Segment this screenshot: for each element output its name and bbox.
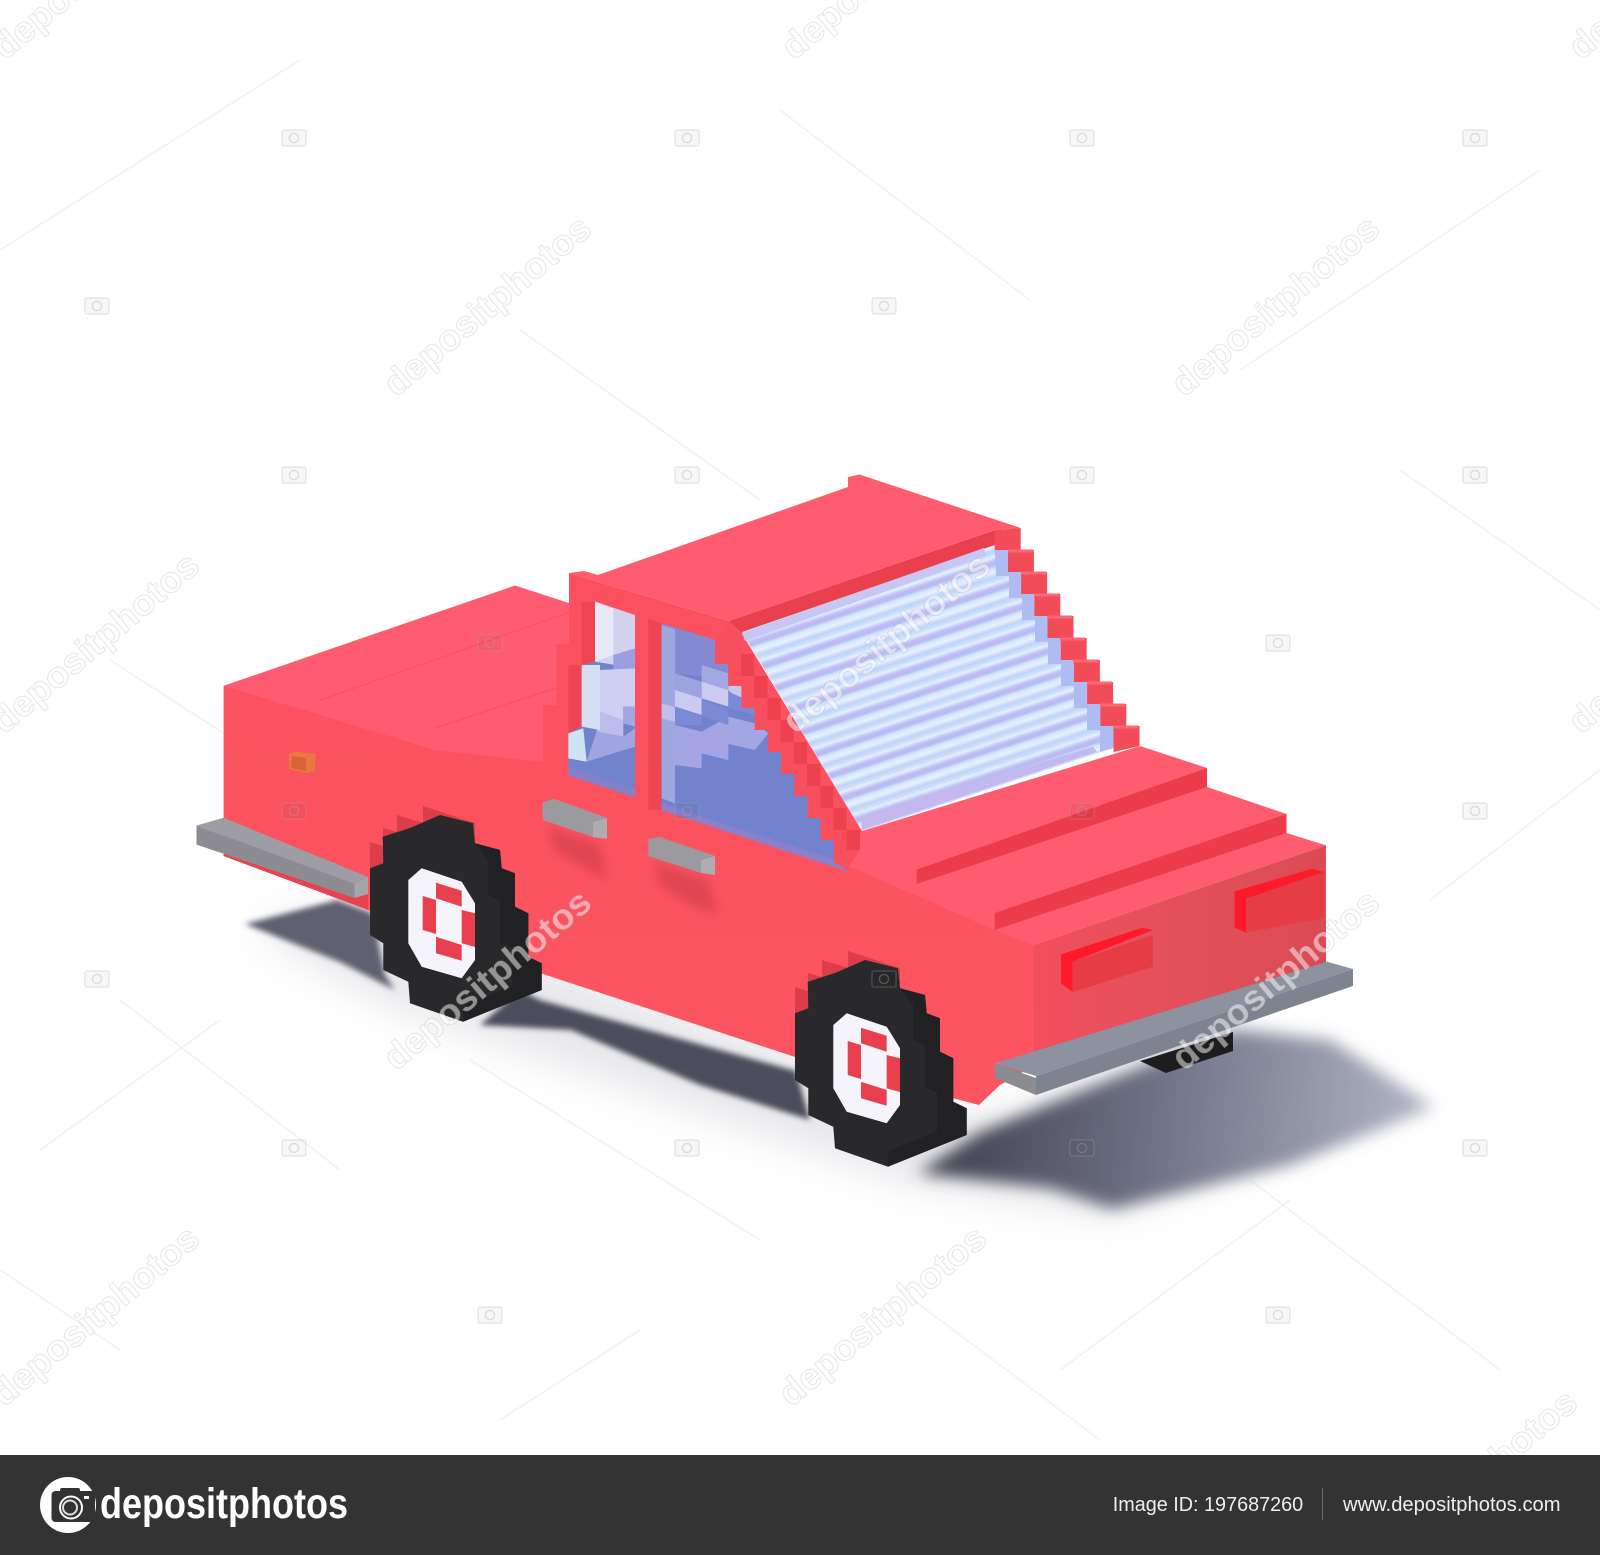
shadow: behind the rear of the car [918, 1030, 1434, 1209]
small camera watermark icons [85, 130, 1487, 1323]
depositphotos diagonal watermarks: depositphotos [375, 881, 599, 1078]
footer website url: www.depositphotos.com [1342, 1493, 1561, 1516]
side marker light [289, 752, 315, 773]
windshield glass [742, 545, 1113, 831]
windshield lower lavender edge [862, 747, 1097, 830]
door handle shadow: front [548, 826, 607, 880]
window frame recesses [568, 602, 662, 810]
stepped pillar: right of windshield [995, 528, 1140, 752]
footer logo wordmark: depositphotos [100, 1480, 348, 1528]
roof top [569, 474, 1021, 621]
body side panel [224, 573, 1034, 1105]
shadow: front of car [245, 900, 395, 990]
side window: front [568, 602, 635, 797]
front bumper [196, 818, 368, 910]
footer logo icon: camera [40, 1477, 96, 1533]
door handle: rear [648, 837, 715, 875]
deck riser steps [917, 768, 1286, 930]
depositphotos diagonal watermarks: depositphotos [375, 207, 599, 404]
rear bumper [995, 962, 1353, 1095]
rear deck top surfaces [847, 746, 1326, 960]
left tail light [1061, 928, 1153, 992]
door handle shadow: rear [654, 862, 718, 915]
door handle: front [543, 799, 607, 839]
hood top [224, 586, 575, 790]
right pillar highlight edges [1008, 551, 1138, 727]
depositphotos diagonal watermarks: depositphotos [1163, 207, 1387, 404]
shadow: under the car side [480, 990, 810, 1120]
hood seam lines [318, 612, 570, 728]
wide soft ground shadow [250, 900, 1400, 1215]
footer bar [0, 1455, 1600, 1555]
roof front edge band [729, 530, 995, 634]
stepped A pillar: darker cube sides [741, 654, 860, 850]
rear wheel [795, 951, 967, 1167]
far rear wheel [1140, 1032, 1233, 1073]
car [196, 474, 1353, 1167]
windshield upper lavender edge [742, 548, 986, 641]
depositphotos diagonal watermarks: depositphotos [1163, 881, 1387, 1078]
side window: door [662, 623, 848, 872]
right tail light [1234, 869, 1324, 933]
footer divider [1322, 1488, 1323, 1520]
footer image id: Image ID: 197687260 [1113, 1493, 1303, 1516]
depositphotos diagonal watermarks: depositphotos [774, 544, 998, 741]
depositphotos diagonal watermarks: depositphotos [770, 1217, 994, 1414]
stepped A pillar: left of windshield [715, 621, 860, 871]
front wheel [370, 806, 542, 1022]
rear face [1034, 845, 1326, 1066]
windshield glass side steps [995, 548, 1114, 752]
